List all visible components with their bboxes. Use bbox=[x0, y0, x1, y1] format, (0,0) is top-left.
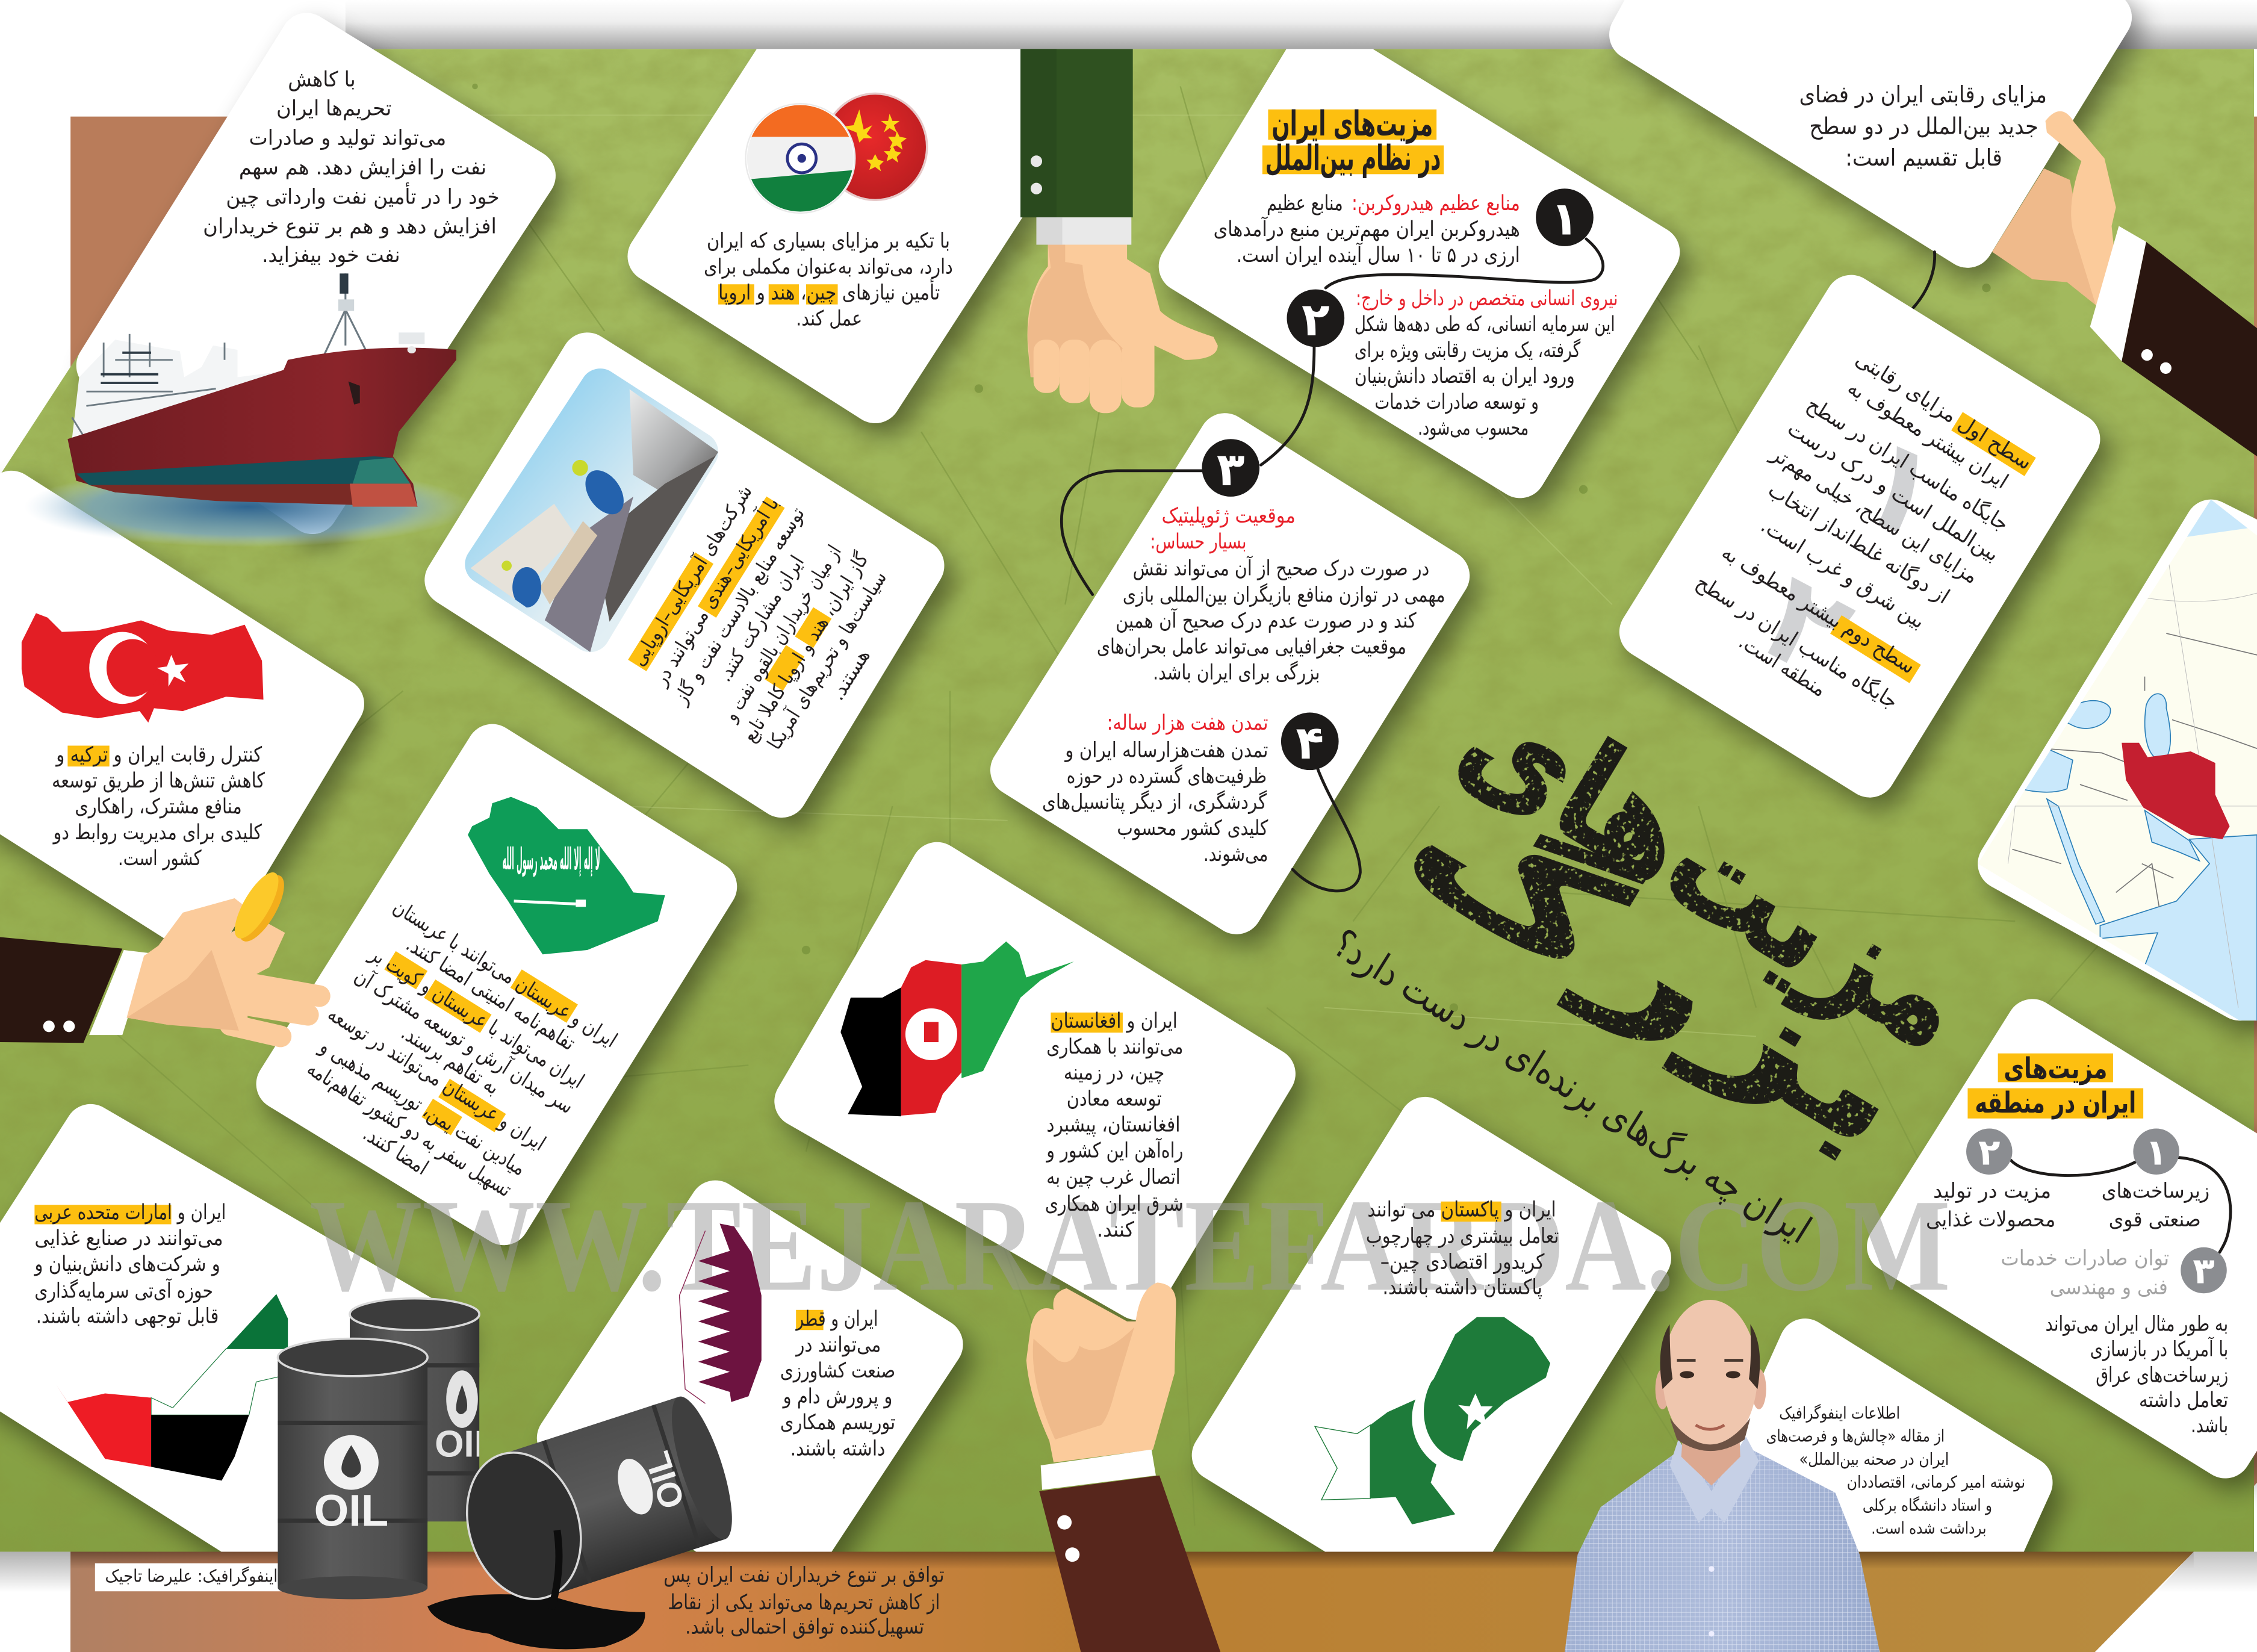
panel: pipeline card bbox=[450, 358, 918, 792]
Afghanistan text: توسعه معادن bbox=[1067, 1087, 1161, 1111]
Saudi text: ایران و عربستان می‌توانند با عربستان bbox=[389, 895, 621, 1052]
Saudi text: امضا کنند. bbox=[359, 1122, 432, 1180]
map: Saudi Arabia bbox=[468, 797, 665, 954]
intro text: جدید بین‌الملل در دو سطح bbox=[1809, 113, 2038, 140]
heading: advantages in the region: ایران در منطقه bbox=[1975, 1087, 2136, 1120]
Turkey text: کشور است. bbox=[118, 846, 202, 871]
panel: levels card bbox=[1645, 301, 2074, 772]
Qatar text: ایران و قطر bbox=[795, 1307, 878, 1331]
photo: pipeline worker bbox=[461, 377, 727, 652]
panel: map card bbox=[2004, 526, 2257, 995]
map: UAE bbox=[56, 1294, 288, 1480]
illustration: overturned oil barrel bbox=[449, 1391, 744, 1614]
top shadow band bbox=[346, 0, 2257, 49]
credit label bbox=[95, 1564, 292, 1591]
illustration: oil barrel front: OIL bbox=[314, 1485, 388, 1535]
pipeline text: هستند. bbox=[825, 645, 875, 704]
ship text: نفت خود بیفزاید. bbox=[262, 243, 400, 267]
text: items 1 and 2: گرفته، یک مزیت رقابتی ویژه برای bbox=[1355, 338, 1581, 362]
heading: advantages in international system: مزیت‌های ایران bbox=[1271, 104, 1433, 144]
illustration: hand holding the card, top right bbox=[1992, 111, 2257, 456]
ship text: می‌تواند تولید و صادرات bbox=[249, 126, 446, 150]
Saudi text: به تفاهم برسند. bbox=[397, 1020, 504, 1100]
Pakistan text: ایران و پاکستان می توانند bbox=[1367, 1197, 1556, 1222]
source info text: برداشت شده است. bbox=[1871, 1519, 1987, 1538]
Pakistan text bbox=[1366, 1197, 1559, 1299]
text: items 1 and 2: ورود ایران به اقتصاد دانش‌بنیان bbox=[1355, 364, 1575, 388]
credit label: اینفوگرافیک: علیرضا تاجیک bbox=[105, 1566, 278, 1586]
illustration: oil puddle bbox=[427, 1594, 645, 1649]
regional text: توان صادرات خدمات bbox=[2001, 1247, 2169, 1271]
bottom strip text: تسهیل‌کننده توافق احتمالی باشد. bbox=[685, 1615, 924, 1639]
number circle gray 1: ۱ bbox=[2145, 1132, 2167, 1173]
Saudi text: میادین نفت یمن، توریسم مذهبی و bbox=[315, 1034, 530, 1181]
regional text: تعامل داشته bbox=[2139, 1388, 2228, 1412]
text: items 3 and 4: موقعیت ژئوپلیتیک bbox=[1161, 504, 1296, 528]
map: Turkey bbox=[22, 613, 264, 722]
text: items 3 and 4: تمدن هفت هزار ساله: bbox=[1107, 711, 1268, 735]
text: لا إله إلا الله محمد رسول الله bbox=[502, 841, 600, 877]
panel: UAE card bbox=[0, 1130, 438, 1564]
number circle gray 3: ۳ bbox=[2193, 1251, 2215, 1293]
panel: ship card bbox=[102, 39, 530, 508]
Turkey text: کنترل رقابت ایران و ترکیه و bbox=[55, 743, 262, 767]
Qatar text: می‌توانند در bbox=[795, 1333, 881, 1357]
Saudi text: تفاهم‌نامه امنیتی امضا کنند. bbox=[402, 932, 579, 1055]
Qatar text bbox=[780, 1307, 895, 1461]
intro text: مزایای رقابتی ایران در فضای bbox=[1799, 81, 2047, 108]
panel: source info card bbox=[1707, 1344, 2026, 1652]
source info text: و استاد دانشگاه برکلی bbox=[1863, 1495, 1992, 1515]
text: items 3 and 4: در صورت درک صحیح از آن می‌تواند نقش bbox=[1133, 555, 1429, 580]
source info text: از مقاله «چالش‌ها و فرصت‌های bbox=[1766, 1427, 1945, 1446]
map: Qatar bbox=[680, 1223, 762, 1403]
ship text: افزایش دهد و هم بر تنوع خریداران bbox=[203, 214, 497, 238]
panel: Afghanistan card bbox=[800, 868, 1270, 1294]
Afghanistan text bbox=[1045, 1009, 1183, 1242]
source info text: نوشته امیر کرمانی، اقتصاددان bbox=[1847, 1473, 2025, 1492]
ship text: تحریم‌ها ایران bbox=[276, 96, 391, 120]
panel: Saudi card bbox=[282, 750, 711, 1219]
illustration: green sleeve hand pointing down bbox=[1020, 49, 1218, 413]
pipeline text: گاز ایران، هند و اروپا کاملا تابع bbox=[737, 548, 873, 746]
UAE text: حوزه آی‌تی سرمایه‌گذاری bbox=[34, 1278, 213, 1303]
text: items 3 and 4: بزرگی برای ایران باشد. bbox=[1153, 660, 1320, 685]
heading: advantages in international system: در نظام بین‌الملل bbox=[1265, 138, 1441, 178]
Turkey text: کاهش تنش‌ها از طریق توسعه bbox=[52, 769, 265, 793]
text: items 3 and 4: ظرفیت‌های گسترده در حوزه bbox=[1067, 764, 1267, 789]
UAE text: و شرکت‌های دانش‌بنیان و bbox=[34, 1252, 220, 1276]
China India text: عمل کند. bbox=[796, 306, 862, 331]
panel: regional advantages card bbox=[1893, 1025, 2257, 1452]
bottom strip text bbox=[663, 1564, 944, 1639]
Afghanistan text: می‌توانند با همکاری bbox=[1046, 1035, 1183, 1059]
levels text with highlights: ایران بیشتر معطوف به bbox=[1843, 376, 2013, 494]
Afghanistan text: اتصال غرب چین به bbox=[1046, 1166, 1181, 1190]
shadow under board, bottom edge bbox=[0, 1551, 70, 1592]
illustration: oil tanker bbox=[25, 273, 471, 547]
connector line from 2 to 3 bbox=[1261, 346, 1314, 465]
bottom strip text: از کاهش تحریم‌ها می‌تواند یکی از نقاط bbox=[668, 1591, 940, 1615]
text: items 1 and 2: منابع عظیم bbox=[1267, 191, 1343, 216]
Afghanistan text: ایران و افغانستان bbox=[1051, 1009, 1178, 1033]
map of the Middle East with Iran highlighted bbox=[1958, 489, 2257, 1029]
source info text bbox=[1766, 1403, 2025, 1538]
levels text with highlights: مزایای این سطح، خیلی مهم‌تر bbox=[1766, 441, 1982, 589]
panel: Qatar card bbox=[563, 1206, 937, 1576]
number circle 3 bbox=[1202, 439, 1259, 497]
number circle 1: ۱ bbox=[1551, 193, 1579, 246]
levels text with highlights: جایگاه مناسب ایران در سطح bbox=[1802, 392, 2013, 536]
ship text: خود را در تأمین نفت وارداتی چین bbox=[226, 182, 500, 209]
UAE text: ایران و امارات متحده عربی bbox=[34, 1200, 226, 1225]
number circle gray 2: ۲ bbox=[1978, 1132, 2001, 1173]
number circle gray 1 bbox=[2133, 1129, 2179, 1175]
Turkey text bbox=[52, 743, 265, 871]
Turkey text: کلیدی برای مدیریت روابط دو bbox=[52, 821, 262, 845]
Pakistan text: کریدور اقتصادی چین– bbox=[1380, 1250, 1545, 1275]
Afghanistan text: چین، در زمینه bbox=[1064, 1061, 1164, 1085]
number circle gray 2 bbox=[1966, 1129, 2013, 1175]
pipeline text bbox=[626, 480, 891, 754]
UAE text: قابل توجهی داشته باشند. bbox=[36, 1304, 219, 1328]
China India text bbox=[704, 229, 953, 331]
illustration: oil barrel back: OIL bbox=[435, 1424, 497, 1465]
Pakistan text: پاکستان داشته باشند. bbox=[1383, 1275, 1542, 1299]
number circle 4: ۴ bbox=[1296, 716, 1324, 770]
text: items 1 and 2: و توسعه صادرات خدمات bbox=[1374, 390, 1539, 414]
text: items 3 and 4: کلیدی کشور محسوب bbox=[1117, 816, 1268, 840]
Pakistan text: تعامل بیشتری در چهارچوب bbox=[1366, 1225, 1559, 1249]
regional text: فنی و مهندسی bbox=[2050, 1275, 2168, 1299]
intro text: قابل تقسیم است: bbox=[1845, 144, 2002, 172]
number circle 2: ۲ bbox=[1302, 293, 1330, 347]
photo: author portrait bbox=[1565, 1300, 1880, 1652]
pipeline text: با آمریکایی–هندی می‌توانند در bbox=[648, 492, 783, 691]
illustration: hand holding the card, bottom center bbox=[1026, 1282, 1221, 1652]
Qatar text: و پرورش دام و bbox=[782, 1385, 892, 1409]
text: items 3 and 4: بسیار حساس: bbox=[1150, 530, 1247, 554]
regional text: زیرساخت‌های bbox=[2102, 1179, 2209, 1203]
levels text with highlights bbox=[1692, 347, 2036, 714]
Afghanistan text: افغانستان، پیشبرد bbox=[1046, 1113, 1181, 1137]
number circle 1 bbox=[1536, 188, 1594, 246]
intro text bbox=[1799, 81, 2047, 172]
levels text with highlights: سطح دوم بیشتر معطوف به bbox=[1718, 540, 1919, 679]
connector line from 4 bbox=[1293, 767, 1360, 891]
ship text bbox=[203, 67, 500, 267]
map: Pakistan bbox=[1315, 1317, 1550, 1524]
main title: بزرگ bbox=[1379, 759, 1937, 1182]
flags: China and India bbox=[741, 93, 927, 216]
panel: Pakistan card bbox=[1218, 1123, 1645, 1591]
Afghanistan text: راه‌آهن این کشور و bbox=[1046, 1137, 1183, 1163]
Saudi text: ایران و عربستان می‌توانند در توسعه bbox=[323, 1002, 550, 1156]
text: items 1 and 2: ارزی در ۵ تا ۱۰ سال آینده ایران است. bbox=[1237, 242, 1520, 267]
heading: advantages in the region: مزیت‌های bbox=[2004, 1052, 2107, 1085]
panel: Turkey card bbox=[0, 497, 338, 931]
Qatar text: توریسم همکاری bbox=[780, 1411, 895, 1435]
watermark: WWW.TEJARATEFARDA.COM bbox=[309, 1172, 1951, 1318]
Afghanistan text: شرق ایران همکاری bbox=[1045, 1192, 1183, 1216]
Turkey text: منافع مشترک، راهکاری bbox=[75, 795, 242, 819]
Afghanistan text: کنند. bbox=[1097, 1218, 1135, 1242]
text: items 3 and 4: گردشگری، از دیگر پتانسیل‌های bbox=[1042, 790, 1267, 815]
China India text: با تکیه بر مزایای بسیاری که ایران bbox=[707, 229, 950, 253]
heading: advantages in the region bbox=[1967, 1052, 2143, 1120]
pipeline text: توسعه منابع بالادست نفت و گاز bbox=[669, 503, 809, 709]
UAE text: می‌توانند در صنایع غذایی bbox=[34, 1226, 223, 1250]
China India text: تأمین نیازهای چین، هند و اروپا bbox=[718, 278, 940, 305]
regional text: مزیت در تولید bbox=[1933, 1179, 2051, 1203]
Saudi text: سر میدان آرش و توسعه مشترک آن bbox=[350, 963, 579, 1119]
text: items 1 and 2: هیدروکربن ایران مهم‌ترین منبع درآمدهای bbox=[1214, 216, 1520, 241]
levels text with highlights: بین شرق و غرب است. bbox=[1757, 514, 1929, 634]
illustration: oil barrel back bbox=[350, 1299, 497, 1521]
levels text with highlights: بین‌الملل است و درک درست bbox=[1783, 417, 2004, 567]
text: items 3 and 4: موقعیت جغرافیایی می‌تواند عامل بحران‌های bbox=[1097, 635, 1406, 659]
panel: China India card bbox=[653, 0, 1065, 397]
number circle 4 bbox=[1281, 713, 1339, 770]
regional text bbox=[1926, 1179, 2228, 1438]
number circle 3: ۳ bbox=[1217, 443, 1245, 497]
text: items 1 and 2: منابع عظیم هیدروکربن: bbox=[1352, 191, 1520, 216]
ship text: با کاهش bbox=[288, 67, 356, 92]
panel: Iran advantages in the international system card bbox=[1185, 46, 1654, 472]
illustration: hand with gold coin bbox=[0, 866, 320, 1043]
pipeline text: شرکت‌های آمریکایی–اروپایی bbox=[626, 480, 757, 670]
main title: مزیت‌های bbox=[1433, 656, 1998, 1083]
text: items 1 and 2: نیروی انسانی متخصص در داخل و خارج: bbox=[1356, 287, 1618, 311]
Saudi text: ایران می‌تواند با عربستان و کویت بر bbox=[365, 942, 588, 1093]
text: items 1 and 2: این سرمایه انسانی، که طی دهه‌ها شکل bbox=[1355, 312, 1615, 337]
connector line linking numbered items bbox=[1326, 239, 1603, 288]
panel: competitive advantages intro card bbox=[1635, 0, 2106, 242]
pipeline text: از میان خریداران بالقوه نفت و bbox=[718, 541, 846, 726]
text: items 1 and 2: محسوب می‌شود. bbox=[1418, 416, 1529, 440]
text: items 3 and 4: تمدن هفت‌هزارساله ایران و bbox=[1064, 739, 1268, 763]
illustration: overturned oil barrel: OIL bbox=[638, 1447, 692, 1514]
number circle gray 3 bbox=[2181, 1247, 2227, 1293]
icon: Iran shape bbox=[2122, 743, 2230, 839]
text: items 3 and 4: کند و در صورت عدم درک صحیح آن همین bbox=[1116, 607, 1417, 633]
source info text: ایران در صحنه بین‌الملل» bbox=[1799, 1450, 1949, 1469]
levels text with highlights: جایگاه مناسب ایران در سطح bbox=[1692, 570, 1902, 714]
levels text with highlights: ۱ bbox=[1837, 406, 1964, 568]
pipeline text: ایران مشارکت کنند. bbox=[713, 551, 809, 686]
text: items 3 and 4 bbox=[1042, 504, 1445, 866]
source info text: اطلاعات اینفوگرافیک bbox=[1779, 1403, 1900, 1423]
subtitle: ایران چه برگ‌های برنده‌ای در دست دارد؟ bbox=[1325, 921, 1819, 1253]
levels text with highlights: منطقه است. bbox=[1734, 630, 1830, 702]
connector line from 3 to card bbox=[1061, 471, 1203, 594]
Qatar text: داشته باشند. bbox=[790, 1436, 885, 1461]
UAE text bbox=[34, 1200, 226, 1328]
text: items 3 and 4: مهمی در توازن منافع بازیگران بین‌المللی بازی bbox=[1123, 582, 1445, 607]
connector: card to level card bbox=[1913, 252, 1935, 308]
panel: positions card bbox=[1016, 439, 1444, 908]
Saudi text: تسهیل سفر به دو کشور تفاهم‌نامه bbox=[303, 1057, 516, 1202]
number circle 2 bbox=[1287, 290, 1344, 347]
levels text with highlights: از دوگانه غلط‌انداز انتخاب bbox=[1764, 477, 1954, 609]
bottom brown strip bbox=[70, 1551, 2257, 1652]
Saudi text bbox=[303, 895, 621, 1202]
regional text: محصولات غذایی bbox=[1926, 1208, 2055, 1232]
China India text: دارد، می‌تواند به‌عنوان مکملی برای bbox=[704, 255, 953, 279]
levels text with highlights: ۲ bbox=[1740, 544, 1874, 707]
map: Afghanistan bbox=[840, 942, 1074, 1116]
regional connector lines bbox=[2011, 1157, 2231, 1252]
heading: advantages in international system bbox=[1262, 104, 1444, 178]
regional text: باشد. bbox=[2191, 1414, 2228, 1438]
levels text with highlights: سطح اول مزایای رقابتی bbox=[1851, 347, 2036, 475]
ship text: نفت را افزایش دهد. هم سهم bbox=[239, 155, 486, 179]
illustration: oil drip bbox=[551, 1530, 559, 1609]
regional text: صنعتی قوی bbox=[2109, 1208, 2201, 1232]
bottom strip text: توافق بر تنوع خریداران نفت ایران پس bbox=[663, 1564, 944, 1588]
pipeline text: سیاست‌ها و تحریم‌های آمریکا bbox=[762, 567, 891, 754]
illustration: oil barrel front bbox=[278, 1339, 427, 1599]
Qatar text: صنعت کشاورزی bbox=[780, 1359, 895, 1383]
text: items 1 and 2 bbox=[1214, 191, 1618, 440]
text: items 3 and 4: می‌شوند. bbox=[1203, 842, 1268, 866]
